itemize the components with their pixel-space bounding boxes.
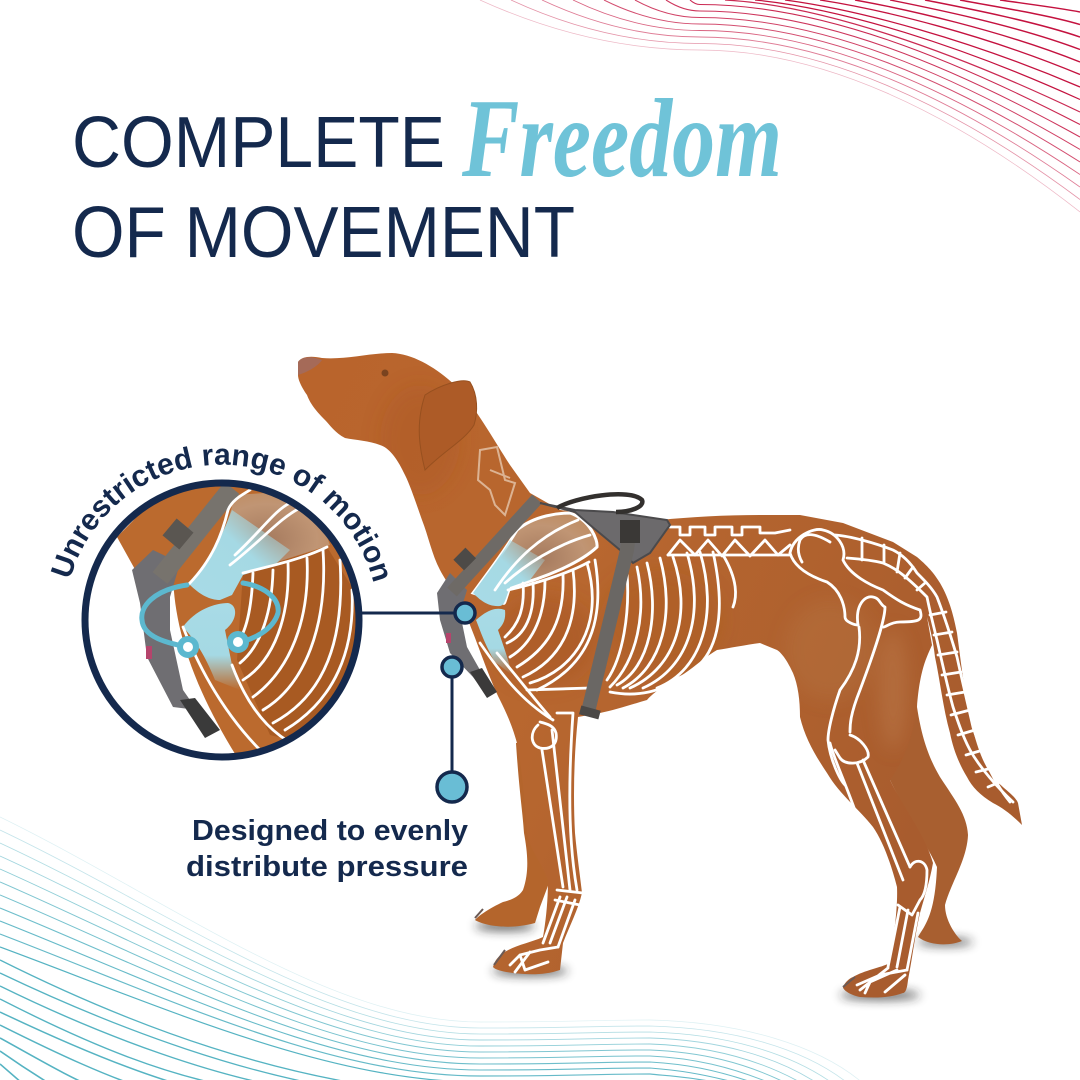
skeleton lines [480, 520, 1013, 993]
strap keeper in lens [163, 519, 193, 549]
title [72, 77, 782, 273]
pressure label: distribute pressure [186, 851, 468, 883]
harness buckle, lower [470, 668, 497, 698]
harness neck strap [452, 499, 537, 592]
pink tag [446, 633, 451, 643]
motion ring dots [177, 631, 249, 658]
blue joint glow [473, 540, 545, 675]
shoulder blade with tint [473, 513, 597, 603]
strap in lens [160, 488, 232, 578]
darker rib shading [237, 548, 356, 738]
strap buckle [453, 548, 476, 570]
pressure label [186, 815, 468, 883]
shoulder tint [227, 493, 330, 564]
chest strap [588, 525, 630, 712]
neck vertebrae [478, 447, 515, 515]
motion ring arcs [142, 583, 278, 647]
harness pad in lens [132, 550, 190, 709]
eye [382, 370, 388, 376]
claws [475, 909, 855, 987]
magnifier lens [85, 480, 360, 757]
chest strap end [579, 706, 601, 719]
harness side pad [437, 573, 493, 697]
far front leg [475, 740, 552, 927]
title: Freedom [461, 77, 782, 201]
red wave lines, top right [480, 0, 1080, 212]
teal wave lines, bottom left [0, 817, 865, 1080]
callout lines and dots [362, 603, 475, 802]
dog [298, 353, 1022, 998]
title: OF MOVEMENT [72, 193, 575, 273]
lens skeleton lines [183, 490, 352, 752]
buckle in lens [180, 698, 220, 738]
harness handle [557, 494, 642, 512]
curved label: Unrestricted range of motion [50, 446, 388, 626]
pink tag in lens [146, 646, 152, 659]
harness back pad [540, 503, 670, 563]
brown body in lens [117, 480, 360, 757]
title: COMPLETE [72, 103, 445, 183]
pressure label: Designed to evenly [192, 815, 468, 847]
fur shading [379, 444, 906, 738]
far hind leg [885, 700, 968, 944]
ear [419, 381, 477, 470]
nose [298, 357, 322, 375]
foot shadows [475, 921, 973, 1000]
body, head, near legs and tail [298, 353, 1022, 998]
blue joint in lens [183, 510, 290, 690]
chest strap buckle [620, 520, 640, 543]
